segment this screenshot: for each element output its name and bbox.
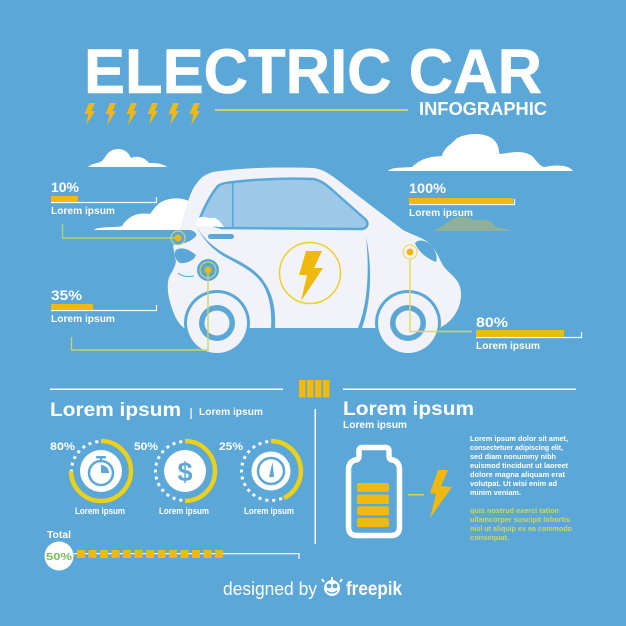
rear light upper <box>172 230 196 245</box>
body text: volutpat. Ut wisi enim ad <box>470 479 557 488</box>
panel: battery <box>343 398 572 542</box>
callout: 10% <box>51 179 185 245</box>
ring: timer 80%: 80% <box>50 441 75 453</box>
cloud: behind car <box>94 198 196 230</box>
callout: 10%: 10% <box>51 179 80 195</box>
panel: statistics <box>44 399 301 570</box>
charge port <box>197 259 219 281</box>
heading: Lorem ipsum <box>50 399 181 421</box>
ring: speed 25%: Lorem ipsum <box>244 506 294 517</box>
ring: timer 80%: Lorem ipsum <box>75 506 125 517</box>
rear wheel <box>184 290 250 356</box>
body text: euismod tincidunt ut laoreet <box>470 461 569 470</box>
car illustration <box>168 167 461 356</box>
ring: speed 25% <box>219 441 301 517</box>
hood vent <box>415 240 437 262</box>
footer: attribution <box>223 577 402 600</box>
heading: Lorem ipsum <box>343 398 474 420</box>
door lines <box>197 227 275 328</box>
body text: consectetuer adipiscing elit, <box>470 443 563 452</box>
door emblem: lightning <box>280 242 340 304</box>
ring: cost 50%: 50% <box>134 441 158 453</box>
highlighted text: nisl ut aliquip ex ea commodo <box>470 524 572 533</box>
ring: speed 25%: 25% <box>219 441 243 453</box>
highlighted text: consequat. <box>470 533 509 542</box>
sub heading: Lorem ipsum <box>199 406 263 418</box>
callout: 100%: Lorem ipsum <box>409 207 473 219</box>
icon row: lightning bolts <box>84 103 200 125</box>
callout: 80%: 80% <box>476 314 509 330</box>
footer: attribution: freepik <box>346 579 402 600</box>
body text: sed diam nonummy nibh <box>470 452 556 461</box>
ring: cost 50%: $ <box>177 457 193 487</box>
callout: 100%: 100% <box>409 180 447 196</box>
body text <box>470 434 569 497</box>
ring: cost 50% <box>134 441 215 517</box>
window <box>200 179 367 229</box>
cloud over window <box>196 217 224 227</box>
icon: battery <box>348 448 400 536</box>
highlighted text <box>470 506 572 542</box>
highlighted text: quis nostrud exerci tation <box>470 506 559 515</box>
callout: 35% <box>51 262 216 350</box>
callout: 35%: Lorem ipsum <box>51 313 115 325</box>
sub heading: Lorem ipsum <box>343 419 407 431</box>
total progress: 50% <box>46 551 73 563</box>
car body <box>168 167 461 328</box>
callout: 10%: Lorem ipsum <box>51 205 115 217</box>
ring: timer 80% <box>50 441 131 517</box>
icon: freepik logo <box>322 577 342 596</box>
front wheel <box>375 290 441 356</box>
subtitle: INFOGRAPHIC <box>419 99 547 119</box>
divider block <box>50 380 576 544</box>
body text: minim veniam. <box>470 488 521 497</box>
icon: lightning <box>430 470 452 518</box>
title: ELECTRIC CAR <box>84 37 542 107</box>
cloud: olive behind label <box>433 217 511 231</box>
body text: dolore magna aliquam erat <box>470 470 566 479</box>
total progress: Total <box>47 530 71 541</box>
ring: cost 50%: Lorem ipsum <box>159 506 209 517</box>
cloud: top right <box>388 134 573 171</box>
body text: Lorem ipsum dolor sit amet, <box>470 434 568 443</box>
total progress <box>44 530 299 570</box>
door handle <box>208 234 234 239</box>
callout: 100% <box>409 180 514 219</box>
rear light lower <box>175 248 196 263</box>
footer: attribution: designed by <box>223 579 317 599</box>
callout: 80%: Lorem ipsum <box>476 340 540 352</box>
callout: 80% <box>403 245 582 352</box>
cloud: top left <box>88 149 167 167</box>
highlighted text: ullamcorper suscipit lobortis <box>470 515 570 524</box>
callout: 35%: 35% <box>51 287 83 303</box>
